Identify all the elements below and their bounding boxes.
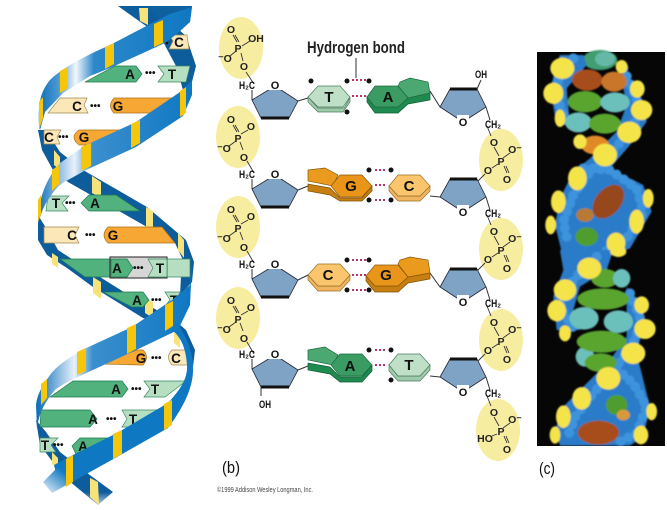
base pair: C upper right: C bbox=[174, 35, 184, 50]
base pair: T-A: T bbox=[41, 438, 50, 453]
phosphate group right 1: O⁻ bbox=[508, 144, 522, 156]
panel: space-filling model bbox=[537, 50, 667, 510]
base pair: A-T: T bbox=[129, 412, 138, 427]
phosphate group left 1: O bbox=[227, 24, 235, 36]
base pair: C-G bbox=[44, 227, 175, 243]
base pair: C-G: C bbox=[72, 99, 82, 114]
base pair: G-C bbox=[100, 350, 190, 366]
phosphate group right 4: O bbox=[490, 407, 498, 419]
base pair: C-G: ••• bbox=[58, 132, 69, 143]
base pair: T-A: A bbox=[78, 439, 88, 454]
chemical group labels: CH₂ bbox=[485, 388, 501, 400]
phosphate group left 3: P bbox=[234, 223, 242, 235]
base pair: A-T: ••• bbox=[131, 384, 142, 395]
base pair: A-T bbox=[50, 381, 186, 397]
base pair: A-T: T bbox=[170, 293, 179, 308]
base row 1: T and A: A bbox=[383, 89, 394, 106]
chemical group labels: CH₂ bbox=[485, 298, 501, 310]
base pair: C-G bbox=[48, 98, 176, 114]
chemical group labels: CH₂ bbox=[485, 119, 501, 131]
phosphate group left 1: ⁻O bbox=[218, 53, 232, 65]
phosphate group left 1: O bbox=[240, 61, 248, 73]
base pair: A-T: ••• bbox=[106, 414, 117, 425]
space-filling atoms bbox=[543, 50, 657, 446]
sugars right column: O bbox=[459, 387, 468, 399]
phosphate group right 1: P bbox=[497, 156, 505, 168]
phosphate group left 2: O bbox=[247, 121, 255, 133]
chemical group labels: H₂C bbox=[239, 169, 255, 181]
base pair: C upper right bbox=[166, 35, 189, 50]
phosphate group right 3: O bbox=[484, 345, 492, 357]
phosphate group right 2: O bbox=[490, 226, 498, 238]
base row 4: A and T: T bbox=[404, 357, 414, 374]
phosphate group right 1 bbox=[477, 126, 523, 191]
phosphate group left 3 bbox=[216, 196, 260, 263]
base pair: A-T: A bbox=[132, 293, 142, 308]
phosphate group left 2: O bbox=[227, 114, 235, 126]
back strands of helix bbox=[36, 6, 196, 505]
photo background bbox=[537, 52, 665, 446]
panel: molecular structure diagram bbox=[216, 17, 523, 494]
sugars left column: O bbox=[271, 169, 280, 181]
base row 3: C and G: C bbox=[323, 267, 334, 284]
phosphate group right 4: O bbox=[503, 444, 511, 456]
sugars left column: O bbox=[271, 349, 280, 361]
phosphate group left 2: ⁻O bbox=[217, 143, 231, 155]
chemical group labels: H₂C bbox=[239, 259, 255, 271]
base row 4: A and T: A bbox=[345, 358, 356, 375]
base pair: boxed A-T: T bbox=[156, 261, 165, 276]
base pair: G-C: C bbox=[171, 351, 181, 366]
phosphate group left 2: P bbox=[234, 133, 242, 145]
hydrogen bond heading: Hydrogen bond bbox=[307, 38, 405, 57]
base pair: A-T bbox=[40, 410, 160, 427]
sugars left column: O bbox=[271, 259, 280, 271]
phosphate group right 2: O bbox=[503, 263, 511, 275]
base pair: C-G: G bbox=[113, 99, 123, 114]
base pair: A-T: ••• bbox=[145, 68, 156, 79]
phosphate group left 2 bbox=[216, 106, 260, 173]
base pair: A-T: T bbox=[151, 382, 160, 397]
phosphate group left 1: P bbox=[234, 43, 242, 55]
phosphate group left 4: O bbox=[227, 295, 235, 307]
phosphate group left 4 bbox=[216, 287, 260, 354]
phosphate group right 2 bbox=[477, 215, 523, 280]
base pair: T-A: ••• bbox=[65, 198, 76, 209]
base pair: G-C: ••• bbox=[151, 353, 162, 364]
phosphate group right 4: P bbox=[497, 426, 505, 438]
phosphate group right 2: P bbox=[497, 245, 505, 257]
base pair: A-T bbox=[85, 66, 190, 82]
phosphate group right 2: O bbox=[484, 254, 492, 266]
base pair: A-T: A bbox=[111, 382, 121, 397]
phosphate group right 1: O bbox=[503, 174, 511, 186]
front strands of helix bbox=[36, 7, 193, 493]
phosphate group right 3: P bbox=[497, 336, 505, 348]
base pair: C-G bbox=[44, 130, 122, 145]
base pair: boxed A-T: A bbox=[112, 261, 122, 276]
phosphate group right 1: O bbox=[484, 165, 492, 177]
base row 2: G and C: C bbox=[404, 178, 415, 195]
phosphate group left 3: O bbox=[247, 211, 255, 223]
chemical group labels: OH bbox=[475, 69, 487, 81]
base pair: boxed A-T: ••• bbox=[133, 263, 144, 274]
label (b): (b) bbox=[222, 458, 240, 477]
phosphate group right 1: O bbox=[490, 137, 498, 149]
base row 3: C and G bbox=[298, 257, 440, 292]
base pair: C-G: ••• bbox=[85, 230, 96, 241]
phosphate group left 4: O bbox=[240, 333, 248, 345]
phosphate group right 3: O⁻ bbox=[508, 324, 522, 336]
base row 3: C and G: G bbox=[380, 267, 392, 284]
base pair: C-G: ••• bbox=[90, 101, 101, 112]
chemical group labels: CH₂ bbox=[485, 208, 501, 220]
base pair: T-A bbox=[40, 438, 112, 454]
base row 2: G and C bbox=[298, 168, 440, 202]
base row 1: T and A: T bbox=[324, 89, 334, 106]
base pair: boxed A-T bbox=[60, 257, 190, 278]
phosphate group left 4: ⁻O bbox=[217, 324, 231, 336]
phosphate group right 3: O bbox=[490, 317, 498, 329]
chemical group labels: OH bbox=[259, 399, 271, 411]
phosphate group left 3: ⁻O bbox=[217, 233, 231, 245]
base pair: C-G: G bbox=[108, 228, 118, 243]
base pair: A-T: A bbox=[125, 67, 135, 82]
base row 2: G and C: G bbox=[345, 178, 357, 195]
phosphate group right 4: HO bbox=[477, 433, 493, 445]
base pair: C-G: G bbox=[79, 130, 89, 145]
sugars left column: O bbox=[271, 80, 280, 92]
copyright note: ©1999 Addison Wesley Longman, Inc. bbox=[217, 486, 313, 494]
base pair: A-T: A bbox=[88, 412, 98, 427]
phosphate group right 3: O bbox=[503, 354, 511, 366]
base row 1: T and A bbox=[298, 78, 440, 114]
phosphate group left 4: P bbox=[234, 314, 242, 326]
sugars right column: O bbox=[459, 297, 468, 309]
sugars right column bbox=[440, 80, 490, 399]
chemical group labels bbox=[239, 69, 501, 411]
base pair: T-A bbox=[46, 195, 140, 211]
phosphate group left 3: O bbox=[227, 204, 235, 216]
base pair: T-A: ••• bbox=[53, 440, 64, 451]
phosphate group left 1: OH bbox=[248, 33, 264, 45]
phosphate group right 4: O⁻ bbox=[508, 414, 522, 426]
phosphate group left 2: O bbox=[240, 152, 248, 164]
chemical group labels: H₂C bbox=[239, 80, 255, 92]
phosphate group left 4: O bbox=[247, 302, 255, 314]
base row 4: A and T bbox=[298, 347, 440, 382]
phosphate group left 3: O bbox=[240, 242, 248, 254]
sugars right column: O bbox=[459, 117, 468, 129]
phosphate group left 1 bbox=[218, 17, 264, 84]
label (c): (c) bbox=[539, 459, 555, 478]
phosphate group right 3 bbox=[477, 306, 523, 371]
base pair: T-A: A bbox=[90, 196, 100, 211]
base pair: A-T: ••• bbox=[151, 295, 162, 306]
chemical group labels: H₂C bbox=[239, 349, 255, 361]
hydrogen bond heading bbox=[307, 38, 405, 78]
panel: double helix ribbon model bbox=[36, 6, 196, 505]
base pair: C-G: C bbox=[44, 130, 54, 145]
base pair: C-G: C bbox=[67, 228, 77, 243]
sugars right column: O bbox=[459, 207, 468, 219]
base pair: G-C: G bbox=[136, 351, 146, 366]
base pair: A-T bbox=[103, 292, 180, 308]
phosphate group right 2: O⁻ bbox=[508, 233, 522, 245]
sugars left column bbox=[252, 79, 298, 396]
base pair: A-T: T bbox=[168, 67, 177, 82]
base pair: T-A: T bbox=[52, 196, 61, 211]
phosphate group right 4 bbox=[476, 396, 522, 461]
